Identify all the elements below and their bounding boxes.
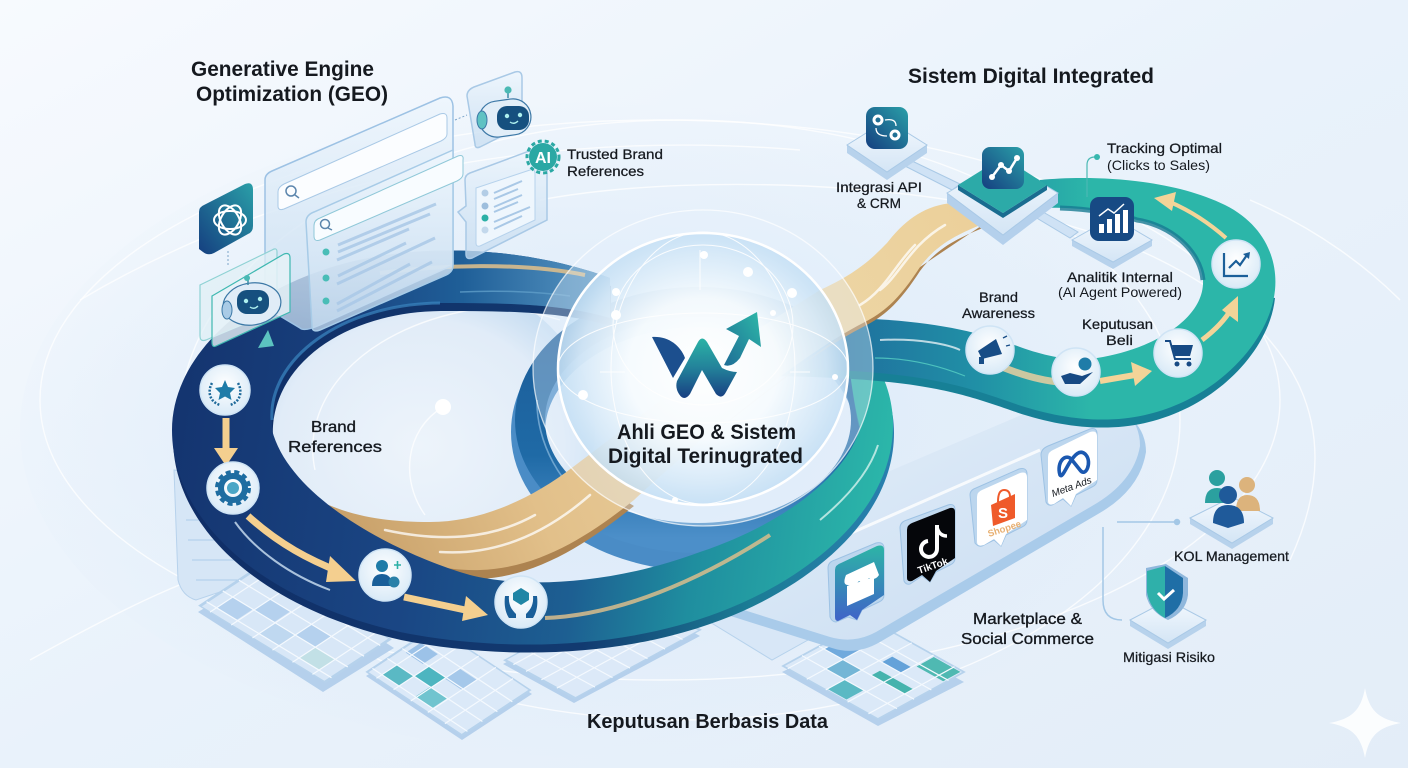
label: KOL Management: KOL Management xyxy=(1174,548,1289,564)
icon: hand with coin xyxy=(1052,348,1100,396)
search bar 1 xyxy=(278,114,447,210)
icon: Shopee xyxy=(970,469,1027,546)
label: Analitik Internal: (AI Agent Powered) xyxy=(1058,284,1182,300)
arrows: brand references path xyxy=(214,418,488,621)
marketplace icons xyxy=(828,429,1097,622)
icon: gear xyxy=(207,462,259,514)
panel: marketplace tray xyxy=(680,390,1146,651)
panel: AI answer card xyxy=(458,147,547,258)
ring top band lighter section xyxy=(270,251,610,325)
icon: growth chart xyxy=(1212,240,1260,288)
panel: data grid 2 xyxy=(366,627,532,740)
connector: API to hub xyxy=(903,160,960,190)
label: Keputusan Beli: Keputusan xyxy=(1082,316,1153,332)
title: Sistem Digital Integrated: Sistem Digital Integrated xyxy=(908,65,1154,88)
text: sphere caption: Digital Terinugrated xyxy=(608,445,803,468)
icon: Meta Ads xyxy=(1041,429,1097,506)
left navy-to-teal ring xyxy=(172,251,894,653)
label: Integrasi API & CRM: Integrasi API xyxy=(836,179,922,195)
center node dot on background xyxy=(435,399,451,415)
label: Analitik Internal: Analitik Internal xyxy=(1067,269,1173,285)
right teal road xyxy=(770,178,1275,428)
icon: Shopee: S xyxy=(998,505,1008,522)
icon: hub tile xyxy=(947,147,1058,245)
label: Brand Awareness: Awareness xyxy=(962,305,1035,321)
text: sphere caption: Ahli GEO & Sistem xyxy=(617,421,796,444)
label: Mitigasi Risiko: Mitigasi Risiko xyxy=(1123,649,1215,665)
icon: user with shield xyxy=(359,549,411,601)
back ring behind sphere xyxy=(528,302,872,554)
panel: data grid 4 xyxy=(782,619,964,726)
icon: TikTok: TikTok xyxy=(916,556,950,577)
label: Tracking Optimal xyxy=(1107,140,1222,173)
label: Tracking Optimal: (Clicks to Sales) xyxy=(1107,157,1210,173)
connector: hub to analytics xyxy=(1030,208,1078,238)
icon: analytics tile xyxy=(1072,197,1152,269)
icon: robot card top xyxy=(455,72,533,148)
connector lines xyxy=(1103,520,1180,620)
label: Brand Awareness: Brand xyxy=(979,289,1018,305)
central glass sphere xyxy=(533,210,873,526)
label: Brand References: References xyxy=(288,439,382,456)
title: Keputusan Berbasis Data: Keputusan Berbasis Data xyxy=(587,711,829,733)
label: Trusted Brand References xyxy=(567,146,663,179)
label: Marketplace & Social Commerce xyxy=(961,611,1094,648)
ring hole interior xyxy=(245,275,595,585)
arrow: hand to cart xyxy=(1100,362,1152,386)
icon: AI badge: AI xyxy=(535,150,551,167)
icon: hands with box xyxy=(495,576,547,628)
arrow: to hands xyxy=(404,596,488,621)
title: Generative Engine Optimization xyxy=(191,58,388,106)
search bar 2 xyxy=(314,156,463,240)
label: Integrasi API & CRM xyxy=(836,179,922,211)
arrow: cart to chart xyxy=(1202,296,1238,340)
label: Keputusan Beli: Beli xyxy=(1106,332,1133,348)
icon: robot card lower xyxy=(200,249,290,348)
label: Trusted Brand References: References xyxy=(567,163,644,179)
arrow: chart to top xyxy=(1154,192,1226,238)
icon: sparkle xyxy=(1329,688,1401,758)
arrow: down xyxy=(214,418,238,466)
icon: shield xyxy=(1130,564,1206,649)
icon: Meta Ads: Meta Ads xyxy=(1050,475,1093,500)
panel: small sheet behind tray xyxy=(700,596,808,660)
label: Keputusan Beli xyxy=(1082,316,1153,348)
logo: W with arrow xyxy=(652,312,761,398)
text: sphere caption xyxy=(608,421,803,468)
gold ribbon lower part xyxy=(300,370,700,579)
title: Generative Engine Optimization: Generative Engine xyxy=(191,58,374,81)
digital system nodes xyxy=(847,107,1260,396)
data panels: Keputusan Berbasis Data xyxy=(174,470,964,740)
panel: data grid 3 xyxy=(503,592,700,703)
GEO cluster xyxy=(199,72,559,348)
panel: data grid 1 xyxy=(198,563,394,692)
label: Marketplace & Social Commerce: Marketplace & xyxy=(973,611,1082,628)
icon: brand star badge xyxy=(200,365,250,415)
panel: big browser window xyxy=(265,97,453,329)
gold ribbon upper part xyxy=(700,203,987,444)
label: Marketplace & Social Commerce: Social Commerce xyxy=(961,631,1094,648)
icon: API tile xyxy=(847,107,927,180)
KOL and risk nodes xyxy=(1103,470,1273,649)
icon: TikTok xyxy=(900,505,955,584)
icon: cart xyxy=(1154,329,1202,377)
arrow: to user xyxy=(248,516,356,582)
label: Brand References xyxy=(288,419,382,456)
icon: store xyxy=(828,543,884,622)
arrow: tracking leader xyxy=(1087,154,1100,197)
icon: KOL people xyxy=(1190,470,1273,549)
label: Integrasi API & CRM: & CRM xyxy=(857,195,901,211)
icon: ChatGPT logo tile xyxy=(199,183,253,254)
icon: AI badge xyxy=(527,141,559,173)
label: Trusted Brand References: Trusted Brand xyxy=(567,146,663,162)
panel: results window xyxy=(306,150,463,331)
icon: Shopee: Shopee xyxy=(987,519,1023,540)
label: Tracking Optimal: Tracking Optimal xyxy=(1107,140,1222,156)
label: Brand Awareness xyxy=(962,289,1035,321)
icon: megaphone xyxy=(966,326,1014,374)
label: Analitik Internal xyxy=(1058,269,1182,300)
panel: left curved data sheet xyxy=(174,470,262,600)
label: Brand References: Brand xyxy=(311,419,356,436)
title: Generative Engine Optimization: Optimization (GEO) xyxy=(196,83,388,106)
